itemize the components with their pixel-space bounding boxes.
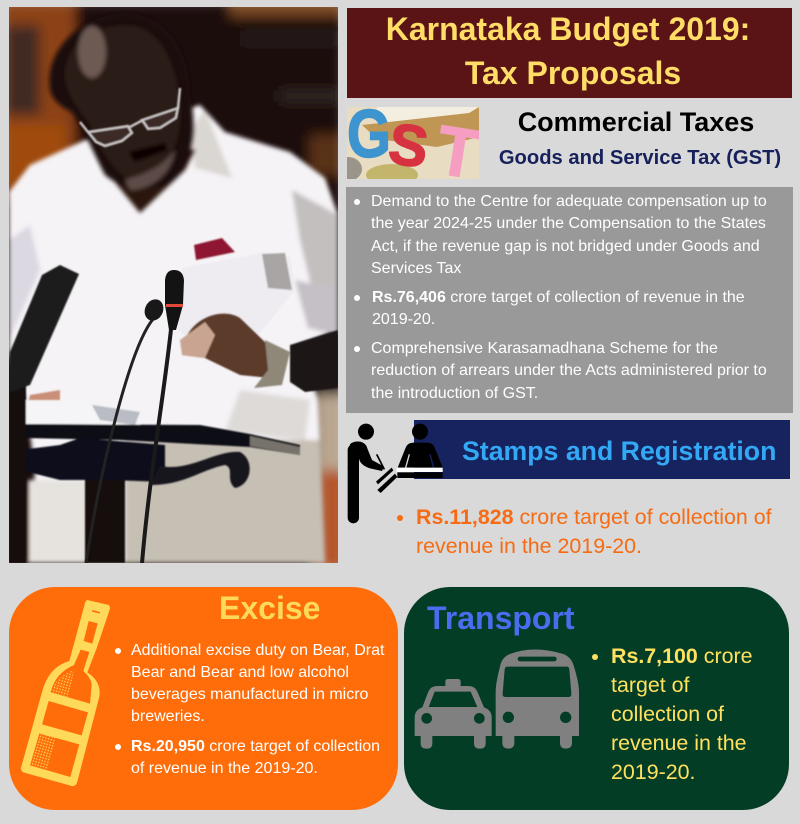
bullet: excise target: of revenue in the 2019-20. (131, 760, 318, 777)
bullet: excise target: Rs.20,950 crore target of collection (131, 738, 380, 755)
text: transport target: collection of (611, 702, 724, 726)
panel: GST points (346, 187, 793, 413)
title: Karnataka Budget 2019: (386, 11, 750, 47)
text: stamps target: Rs.11,828 crore target of collection of (416, 505, 772, 529)
bullet: additional duty (115, 642, 384, 725)
icon: registration clerk and citizen (348, 424, 443, 524)
title (347, 8, 792, 98)
bullet: additional duty: breweries. (131, 708, 205, 725)
bullet: additional duty: beverages manufactured in micro (131, 686, 368, 703)
bullet: compensation demand: the year 2024-25 under the Compensation to the States (371, 215, 766, 232)
bullet: revenue target: 2019-20. (372, 311, 435, 328)
text: transport target (592, 644, 753, 784)
bullet: Karasamadhana scheme (354, 340, 767, 402)
papers and pocket (178, 238, 295, 360)
text: stamps target (397, 505, 772, 558)
panel: excise (9, 587, 398, 810)
lectern (9, 265, 300, 563)
text: transport target: target of (611, 673, 689, 697)
hand and watch (28, 314, 338, 405)
bullet: additional duty: Bear and Bear and low alcohol (131, 664, 349, 681)
title: Tax Proposals (465, 55, 681, 91)
bullet: Karasamadhana scheme: the introduction of GST. (371, 385, 538, 402)
text: transport target: Rs.7,100 crore (611, 644, 753, 668)
photo: minister speaking at lectern (9, 7, 338, 563)
bullet: additional duty: Additional excise duty on Bear, Drat (131, 642, 384, 659)
bullet: excise target (115, 738, 380, 777)
bullet: Karasamadhana scheme: Comprehensive Karasamadhana Scheme for the (371, 340, 718, 357)
icon: bottle (21, 600, 110, 786)
icon: taxi and bus (414, 650, 579, 749)
bullet: compensation demand: Services Tax (371, 260, 461, 277)
bullet: compensation demand: Act, if the revenue gap is not bridged under Goods and (371, 238, 760, 255)
subheading: GST: Goods and Service Tax (GST) (499, 147, 781, 169)
bullet: revenue target: Rs.76,406 crore target of collection of revenue in the (372, 289, 745, 306)
panel: transport (404, 587, 789, 810)
heading: commercial taxes: Commercial Taxes (518, 107, 754, 137)
icon: GST letters image: S (385, 111, 432, 179)
heading: stamps and registration (414, 420, 790, 479)
bullet: revenue target (354, 289, 745, 328)
microphones (86, 270, 184, 563)
glasses (80, 88, 180, 146)
text: transport target: revenue in the (611, 731, 747, 755)
bullet: compensation demand: Demand to the Centre for adequate compensation up to (371, 193, 767, 210)
heading: stamps and registration: Stamps and Registration (462, 436, 776, 466)
heading: excise: Excise (219, 590, 320, 626)
bullet: Karasamadhana scheme: reduction of arrears under the Acts administered prior to (371, 362, 767, 379)
shirt (9, 105, 338, 563)
text: transport target: 2019-20. (611, 760, 695, 784)
text: stamps target: revenue in the 2019-20. (416, 534, 642, 558)
icon: GST letters image (347, 107, 479, 179)
background (0, 0, 348, 575)
heading: transport: Transport (427, 600, 575, 636)
bullet: compensation demand (354, 193, 767, 277)
head (49, 13, 195, 213)
